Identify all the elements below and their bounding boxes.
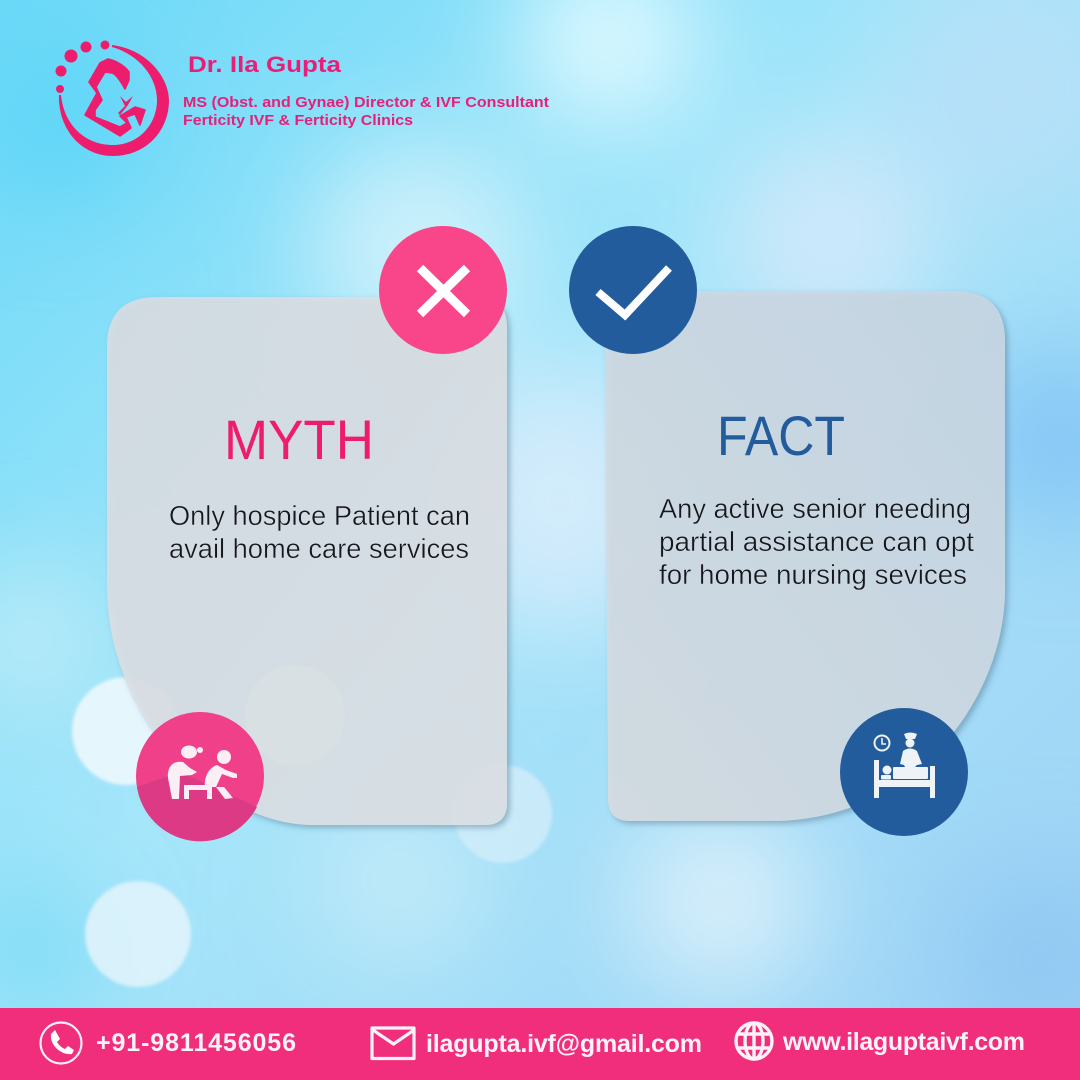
myth heading: MYTH [224, 408, 374, 471]
website: www.ilaguptaivf.com [782, 1028, 1025, 1056]
fact text: for home nursing sevices [659, 559, 967, 590]
myth text: Only hospice Patient can [169, 500, 470, 531]
panel: myth [107, 226, 507, 841]
logo [56, 40, 169, 156]
doctor credentials: MS (Obst. and Gynae) Director & IVF Consultant [183, 95, 549, 111]
myth card [107, 297, 507, 825]
email: ilagupta.ivf@gmail.com [426, 1030, 702, 1058]
icon: nurse at bedside [840, 708, 968, 836]
fact text [659, 493, 974, 590]
icon: caregiver helping patient [136, 712, 264, 841]
panel: fact [569, 226, 1005, 836]
fact text: Any active senior needing [659, 493, 971, 524]
icon: check badge [569, 226, 697, 354]
footer bar [0, 1008, 1080, 1080]
icon: cross badge [379, 226, 507, 354]
fact heading: FACT [717, 404, 845, 467]
fact card [605, 291, 1005, 821]
phone number: +91-9811456056 [96, 1029, 296, 1057]
doctor name: Dr. Ila Gupta [188, 52, 342, 77]
doctor credentials: Ferticity IVF & Ferticity Clinics [183, 113, 413, 129]
icon: phone [40, 1022, 82, 1064]
myth text: avail home care services [169, 533, 469, 564]
faint bokeh circle [245, 665, 345, 765]
doctor credentials [183, 95, 549, 129]
icon: envelope [372, 1028, 414, 1058]
icon: globe [736, 1023, 772, 1059]
fact text: partial assistance can opt [659, 526, 974, 557]
myth text [169, 500, 470, 564]
